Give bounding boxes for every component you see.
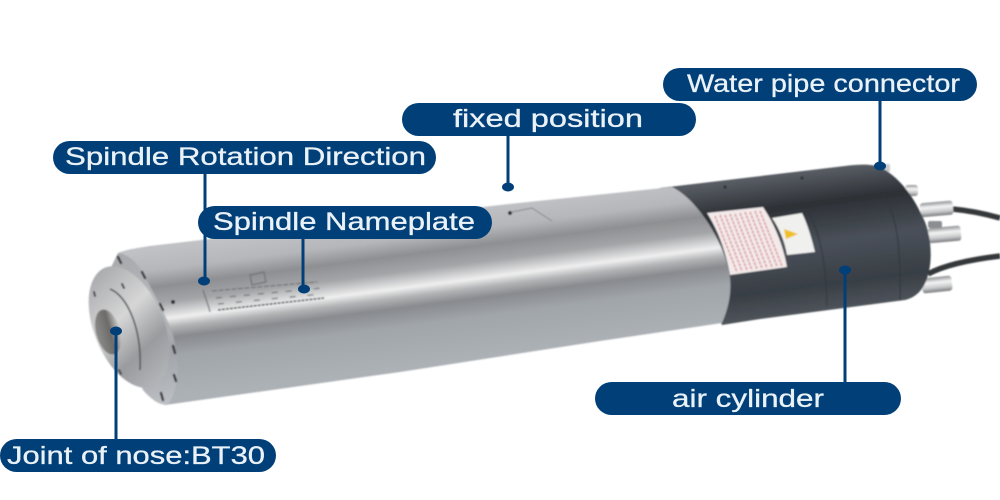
callout: joint of nose: Joint of nose:BT30 (7, 442, 265, 470)
leader: air cylinder (839, 266, 851, 382)
cables (928, 209, 1000, 274)
callout: water pipe connector: Water pipe connector (687, 70, 960, 98)
small holes (171, 176, 804, 304)
callout: spindle rotation direction (53, 141, 436, 174)
callout: spindle nameplate: Spindle Nameplate (213, 208, 475, 236)
air cylinder body (660, 165, 931, 325)
callout: air cylinder (595, 382, 901, 415)
silver housing (118, 187, 730, 405)
nose bolts (94, 284, 124, 374)
leader lines (110, 101, 886, 439)
callout: fixed position: fixed position (453, 105, 643, 133)
callout: spindle nameplate (198, 206, 492, 239)
nose ring (73, 255, 185, 399)
warning label (707, 207, 815, 275)
leader: fixed position (502, 136, 514, 192)
flange (100, 253, 178, 405)
callout: joint of nose (0, 439, 276, 472)
callout: water pipe connector (663, 68, 977, 101)
top position mark (512, 208, 552, 221)
callout: spindle rotation direction: Spindle Rotation Direction (65, 143, 426, 171)
leader: joint of nose (110, 326, 122, 439)
leader: rotation direction (198, 174, 210, 286)
nose groove (110, 289, 140, 370)
callout: fixed position (402, 103, 696, 136)
nose bore (90, 307, 126, 357)
leader: nameplate (298, 238, 310, 294)
leader: water pipe connector (874, 101, 886, 170)
callout: air cylinder: air cylinder (672, 385, 824, 413)
nameplate engraving (203, 272, 324, 312)
flange bolts (118, 257, 176, 400)
spindle illustration (73, 164, 1000, 405)
air cylinder seams (807, 195, 900, 306)
pipe connectors (878, 164, 962, 294)
